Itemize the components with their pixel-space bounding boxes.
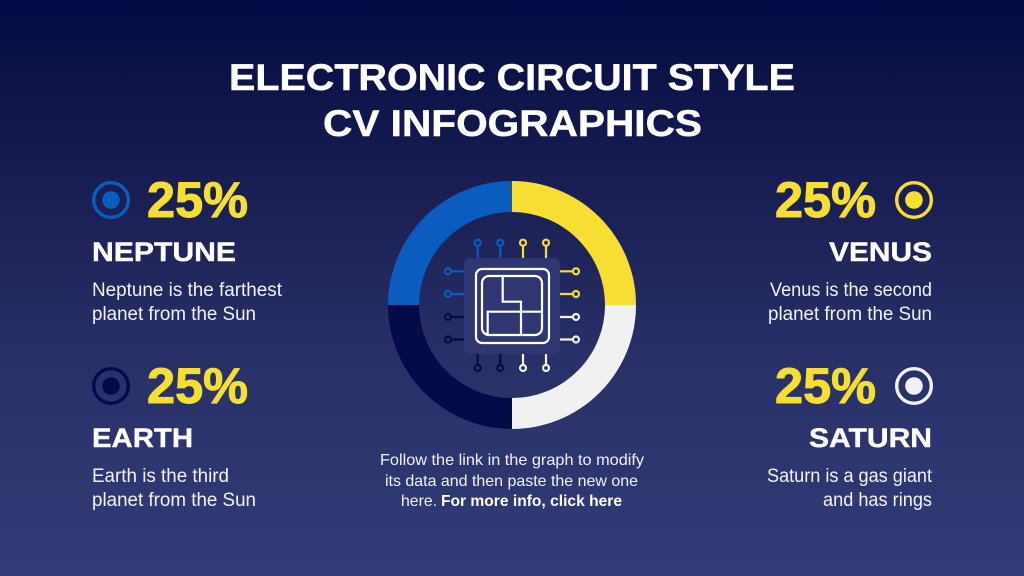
callout: Follow the link in the graph to modify (380, 452, 644, 469)
panel: Venus (768, 172, 932, 325)
Neptune description: planet from the Sun (92, 304, 256, 325)
right pins (560, 268, 579, 342)
Venus heading: VENUS (829, 237, 932, 267)
icon: circuit chip (445, 240, 579, 371)
chip body (464, 258, 560, 354)
Saturn description: Saturn is a gas giant (767, 466, 933, 487)
bottom pins (475, 354, 549, 371)
Neptune heading: NEPTUNE (92, 237, 236, 267)
Earth description: planet from the Sun (92, 490, 256, 511)
Saturn description (767, 466, 933, 511)
Venus percentage: 25% (775, 172, 876, 228)
callout: its data and then paste the new one (385, 473, 638, 490)
Earth heading: EARTH (92, 423, 193, 453)
top pins (475, 240, 549, 258)
Saturn percentage: 25% (775, 358, 876, 414)
Earth description (92, 466, 256, 511)
panel: Neptune (92, 172, 283, 325)
chip outline (476, 269, 549, 343)
Venus description: Venus is the second (770, 280, 932, 301)
Neptune description (92, 280, 283, 325)
title: CV INFOGRAPHICS (323, 103, 702, 144)
icon: Saturn marker (897, 369, 931, 403)
Venus description: planet from the Sun (768, 304, 932, 325)
title: ELECTRONIC CIRCUIT STYLE (229, 57, 795, 98)
title (229, 57, 795, 144)
Neptune description: Neptune is the farthest (92, 280, 283, 301)
callout: For more info, click here (441, 493, 622, 510)
Neptune percentage: 25% (147, 172, 248, 228)
Earth description: Earth is the third (92, 466, 229, 487)
icon: Venus marker (897, 183, 931, 217)
left pins (445, 268, 464, 342)
icon: Neptune marker (94, 183, 128, 217)
donut chart (404, 196, 620, 414)
panel: Earth (92, 358, 256, 511)
Earth percentage: 25% (147, 358, 248, 414)
callout (380, 452, 644, 510)
Venus description (768, 280, 932, 325)
callout: here. (401, 493, 437, 510)
Saturn heading: SATURN (809, 423, 932, 453)
panel: Saturn (767, 358, 933, 511)
icon: Earth marker (94, 369, 128, 403)
Saturn description: and has rings (823, 490, 932, 511)
